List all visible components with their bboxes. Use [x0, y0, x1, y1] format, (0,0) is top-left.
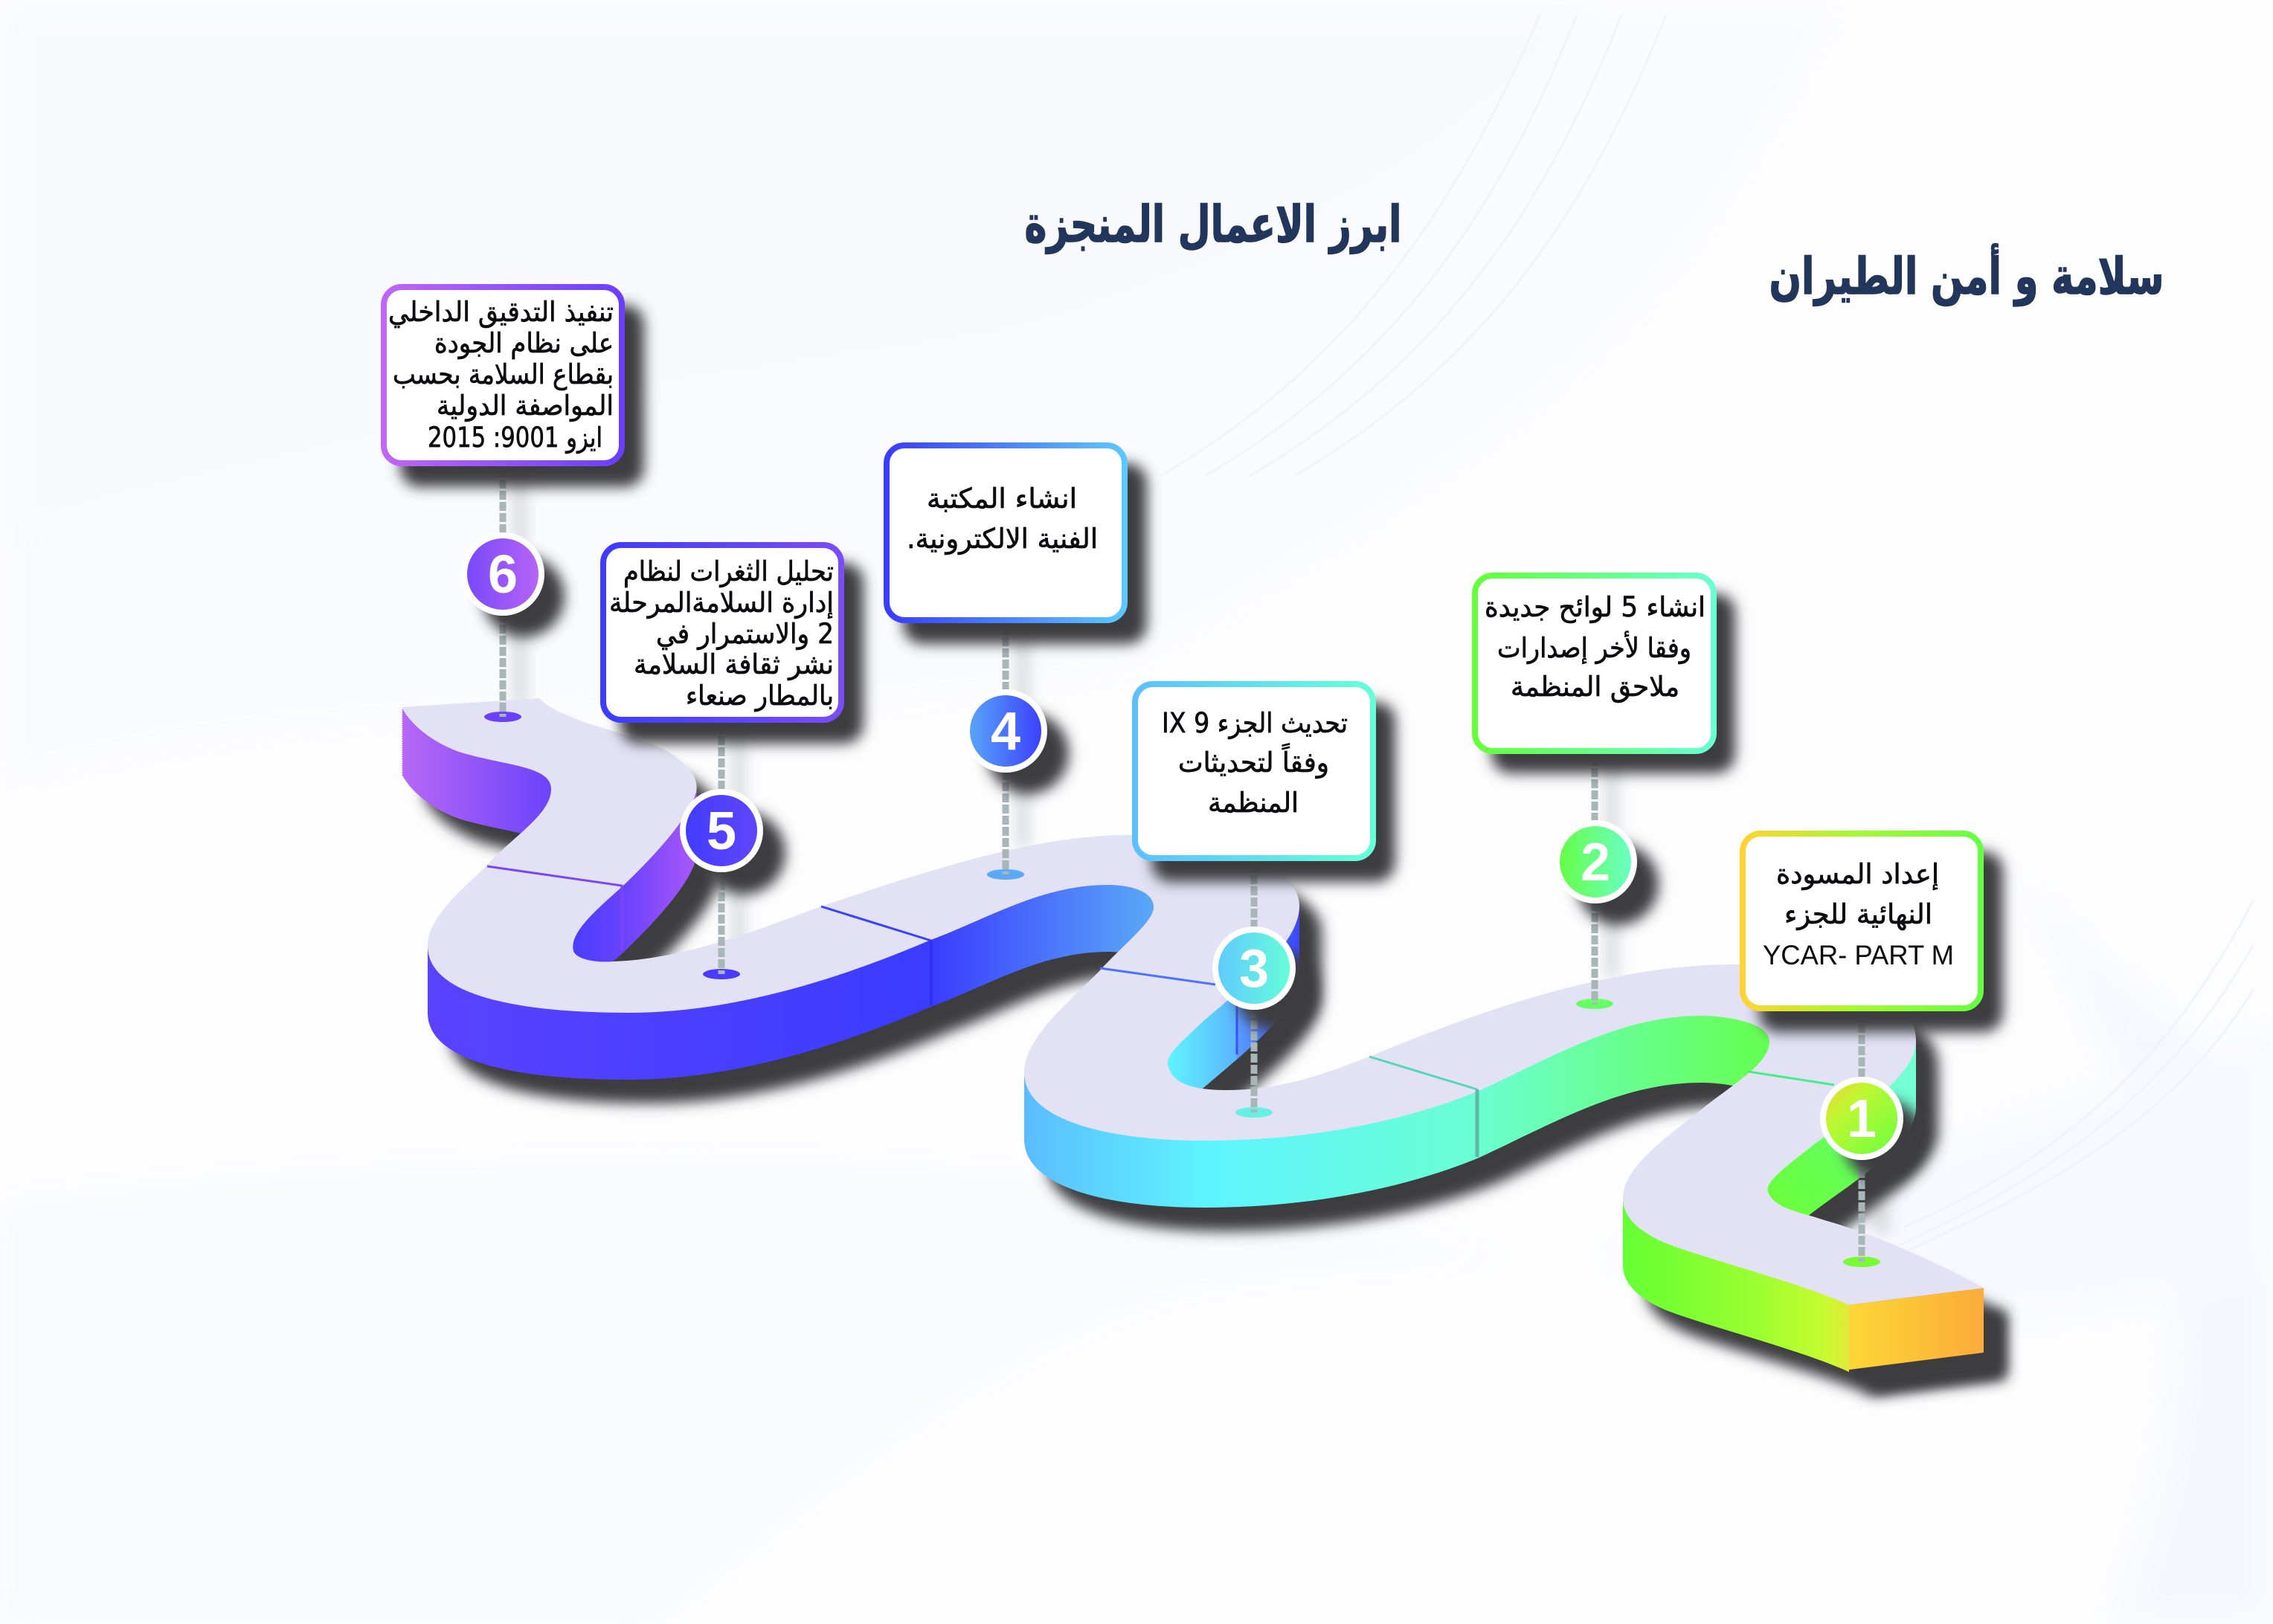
marker 2 [1576, 999, 1613, 1009]
connector 3 [1251, 864, 1257, 1112]
callout 6: المواصفة الدولية [437, 390, 614, 422]
callout 4: الفنية الالكترونية. [907, 523, 1098, 555]
road wall: cyan to aqua [1024, 1073, 1477, 1208]
callout 5: تحليل الثغرات لنظام [623, 555, 834, 587]
callout 5: إدارة السلامةالمرحلة [609, 587, 834, 619]
road wall: blue inner [1237, 907, 1300, 1059]
callout 3: وفقاً لتحديثات [1178, 743, 1329, 779]
badge 3: 3 [1239, 939, 1269, 999]
section seams [487, 866, 1834, 1157]
marker 3 [1235, 1107, 1273, 1118]
callout 6: على نظام الجودة [434, 327, 614, 359]
road wall: blue hump [931, 885, 1154, 1007]
road wall: purple inner [573, 788, 697, 962]
callout 1 [1743, 834, 2003, 1032]
connector 4 [1003, 626, 1009, 874]
callout 2: ملاحق المنظمة [1511, 671, 1679, 703]
connector 6 [500, 468, 506, 717]
step 6: purple [384, 287, 644, 722]
badge 4: 4 [991, 702, 1020, 761]
callout 6: بقطاع السلامة بحسب [393, 358, 614, 390]
callout 5: 2 والاستمرار في [656, 618, 834, 650]
road wall: cyan inner [1168, 1000, 1237, 1089]
callout 6: ايزو 9001: 2015 [428, 422, 602, 454]
badge 3 [1215, 929, 1317, 1031]
road end face [1849, 1288, 1984, 1370]
callout 1: النهائية للجزء [1784, 898, 1932, 930]
callout 4: انشاء المكتبة [927, 483, 1077, 515]
marker 1 [1843, 1257, 1880, 1267]
connector 2 [1592, 757, 1598, 1004]
road wall: green inner [402, 700, 1984, 1372]
callout 3 [1135, 684, 1395, 882]
callout 4 [887, 445, 1147, 644]
badge 2: 2 [1581, 833, 1610, 892]
road shadow [424, 724, 2006, 1396]
step 1: lime [1743, 834, 2003, 1267]
badge 5: 5 [707, 802, 736, 861]
badge 6 [464, 535, 565, 637]
connector 1 [1858, 1013, 1865, 1262]
callout 6 [384, 287, 644, 487]
road wall: purple left [402, 709, 551, 834]
title: ابرز الاعمال المنجزة: ابرز الاعمال المنجزة [1025, 196, 1401, 254]
callout 3: المنظمة [1208, 787, 1299, 819]
callout 6: تنفيذ التدقيق الداخلي [388, 296, 614, 328]
marker 4 [987, 869, 1024, 880]
step 3: cyan [1135, 684, 1395, 1118]
callout 1: YCAR- PART M [1763, 940, 1954, 970]
marker 5 [703, 969, 740, 979]
road wall: green to yellow [402, 700, 1984, 1372]
badge 1 [1823, 1080, 1925, 1182]
callout 5: نشر ثقافة السلامة [634, 648, 834, 680]
badge 5 [683, 792, 785, 895]
step 5: indigo [603, 545, 864, 979]
winding road [402, 698, 1984, 1372]
connector 5 [718, 725, 724, 974]
badge 1: 1 [1847, 1089, 1877, 1149]
pin shadows behind road [512, 468, 1891, 1234]
callout 3: تحديث الجزء 9 IX [1162, 707, 1348, 739]
marker 6 [484, 712, 521, 722]
callout 2 [1475, 576, 1735, 773]
badge 2 [1557, 823, 1659, 925]
callout 2: وفقا لأخر إصدارات [1497, 631, 1691, 664]
end face shadow [1871, 1312, 2006, 1393]
road wall: aqua to green [1477, 1016, 1769, 1159]
step 4: blue [887, 445, 1147, 880]
road top surface [402, 698, 1984, 1305]
step 2: green [1475, 576, 1735, 1009]
callout 5 [603, 545, 864, 744]
badge 6: 6 [488, 545, 518, 605]
callout 5: بالمطار صنعاء [686, 680, 834, 712]
badge 4 [967, 692, 1069, 794]
road wall: indigo [427, 941, 931, 1080]
callout 2: انشاء 5 لوائح جديدة [1485, 591, 1705, 623]
callout 1: إعداد المسودة [1776, 858, 1939, 890]
